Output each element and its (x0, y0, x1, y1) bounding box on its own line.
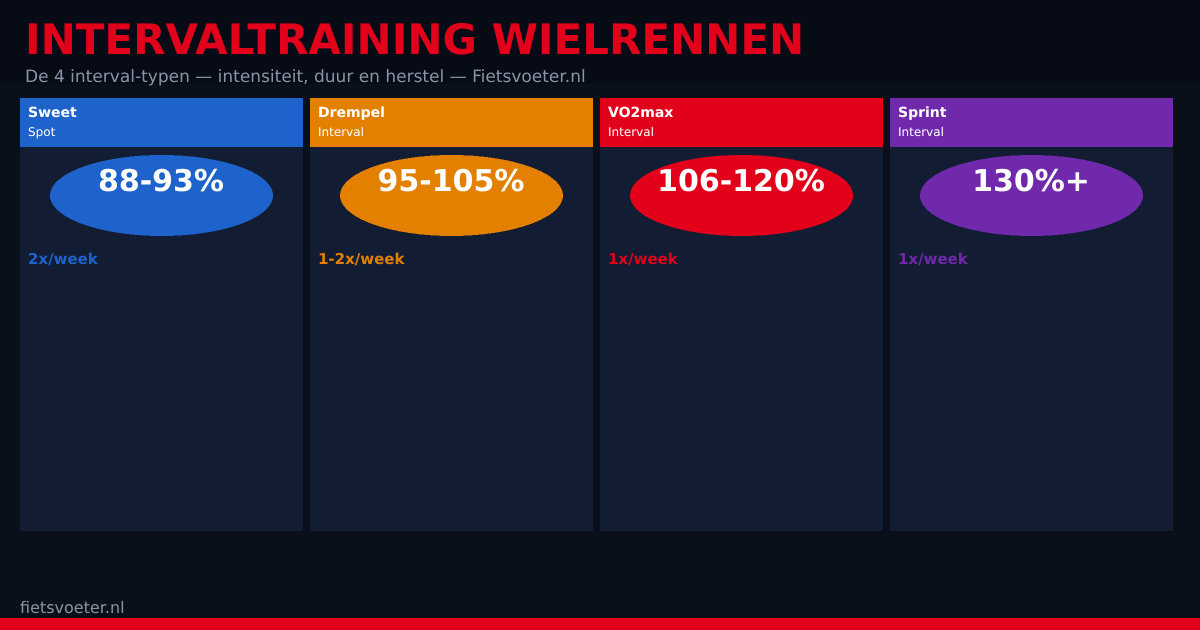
footer bar (0, 618, 1200, 630)
footer text: fietsvoeter.nl (20, 598, 125, 617)
panel: Sweet Spot: Sweet (28, 105, 77, 121)
panel: VO2max Interval: 1x/week (608, 250, 679, 268)
panel: Drempel Interval: 1-2x/week (318, 250, 405, 268)
panel: Sweet Spot: Spot (28, 125, 56, 139)
subtitle: De 4 interval-typen — intensiteit, duur en herstel — Fietsvoeter.nl (25, 67, 586, 87)
panel: VO2max Interval: VO2max (608, 105, 673, 121)
panel: Sprint Interval: Interval (898, 125, 944, 139)
panel: VO2max Interval: 106-120% (657, 164, 825, 199)
panel: Drempel Interval: 95-105% (378, 164, 524, 199)
title: INTERVALTRAINING WIELRENNEN (25, 15, 804, 64)
panel: Drempel Interval (310, 98, 593, 531)
panel: Drempel Interval: Interval (318, 125, 364, 139)
panel: Sprint Interval: 1x/week (898, 250, 969, 268)
panel: Sweet Spot: 2x/week (28, 250, 99, 268)
panel: Sprint Interval: 130%+ (972, 164, 1090, 199)
panel: Drempel Interval: Drempel (318, 105, 385, 121)
panel: Sweet Spot (20, 98, 303, 531)
panel: VO2max Interval: Interval (608, 125, 654, 139)
panel: VO2max Interval (600, 98, 883, 531)
panel: Sweet Spot: 88-93% (98, 164, 224, 199)
panel: Sprint Interval (890, 98, 1173, 531)
panel: Sprint Interval: Sprint (898, 105, 947, 121)
